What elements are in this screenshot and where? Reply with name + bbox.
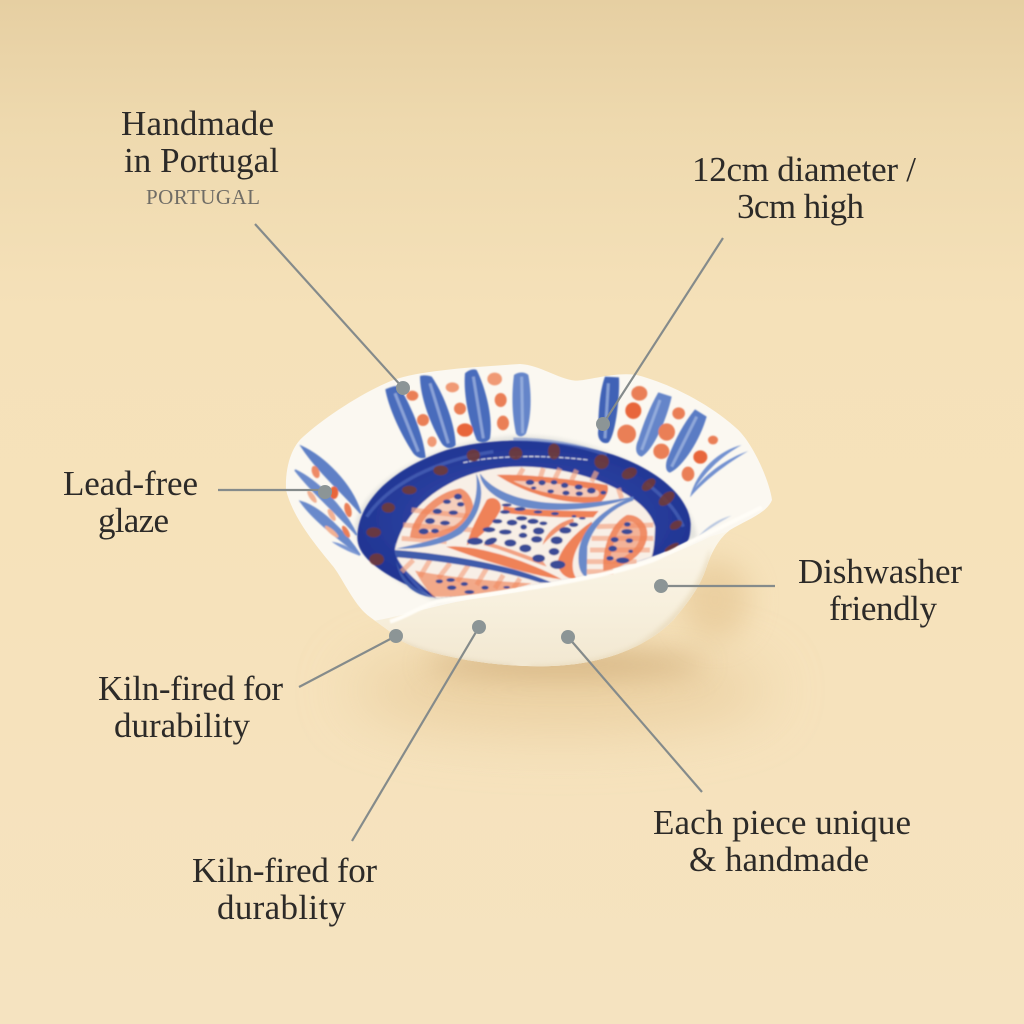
callout: size: 12cm diameter / [692,150,916,189]
callout: kiln-fired durablity [192,851,377,927]
bowl shadow [350,560,770,730]
navy dots [419,480,633,594]
rim orange dots [306,373,718,539]
ceramic bowl [286,364,772,680]
callout: size [692,150,916,226]
leader: each piece [561,630,702,792]
callout: lead-free glaze: Lead-free [63,464,198,503]
callout: dishwasher friendly: Dishwasher [798,552,962,591]
hatch stripes [402,468,653,588]
orange central star [446,498,599,579]
leader: kiln-fired bottom [352,620,486,841]
brown dots on band [366,443,684,565]
callout: dishwasher friendly: friendly [829,589,938,628]
callout: dishwasher friendly [798,552,962,628]
inner wall shade [355,436,697,602]
exterior wall [376,532,728,666]
leader: lead-free [218,485,332,499]
dark blue stripes [395,550,552,597]
callout: handmade in Portugal [121,104,279,209]
callout: handmade in Portugal: PORTUGAL [146,185,260,209]
medallion painted pattern [395,468,653,597]
brush highlights on band [367,439,683,595]
front rim lip [390,507,762,622]
callout: kiln-fired durablity: durablity [217,888,346,927]
callout: kiln-fired durability [98,669,283,745]
callout: kiln-fired durability: durability [114,706,250,745]
callout: lead-free glaze: glaze [98,501,169,540]
blue glazed band [357,441,691,598]
rim painted blue leaves [295,369,748,556]
leader: size [596,238,723,431]
callout: each piece unique: Each piece unique [653,803,911,842]
callout: each piece unique [653,803,911,879]
leader: dishwasher [654,579,775,593]
callout: size: 3cm high [737,187,864,226]
callout: kiln-fired durability: Kiln-fired for [98,669,283,708]
callout: lead-free glaze [63,464,198,540]
painted decoration [295,369,748,598]
callout: handmade in Portugal: in Portugal [124,141,279,180]
center medallion [395,467,655,598]
orange lenses [410,475,647,597]
callout: kiln-fired durablity: Kiln-fired for [192,851,377,890]
rim leaf brush detail [395,377,697,467]
glaze highlight [463,457,588,463]
leader: handmade [255,224,410,395]
callout: handmade in Portugal: Handmade [121,104,274,143]
bowl body [286,364,772,666]
callout: each piece unique: & handmade [689,840,869,879]
leader: kiln-fired left [299,629,403,687]
blue arcs [396,473,633,577]
